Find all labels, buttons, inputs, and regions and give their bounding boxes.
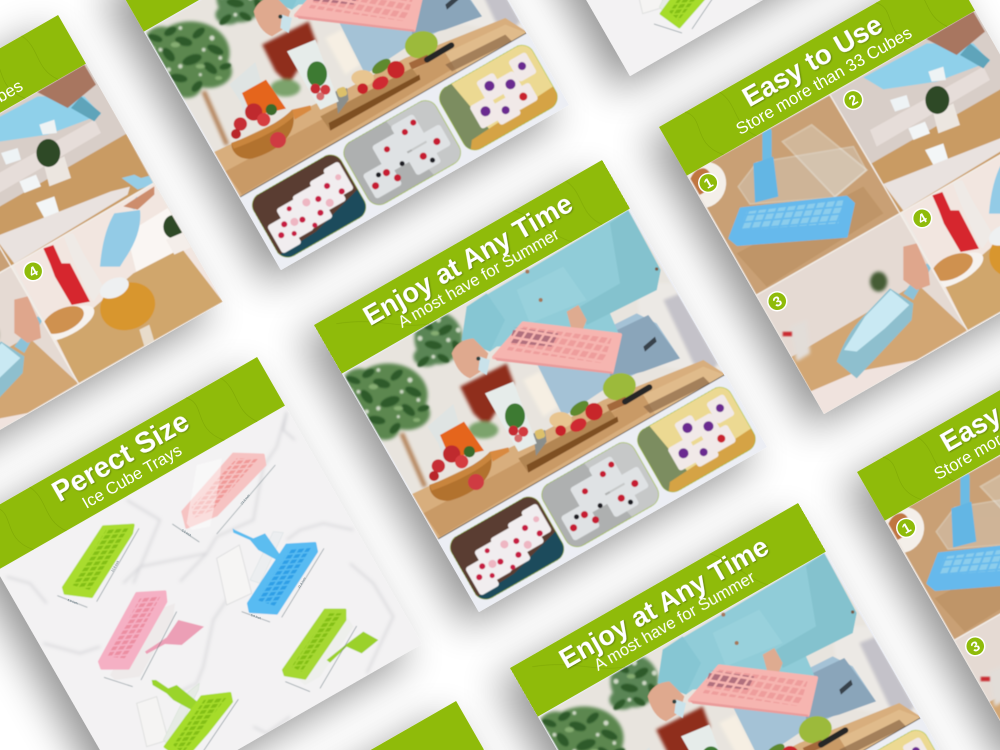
card: bottom banner corner	[168, 701, 621, 750]
card: Perfect Size, top copy	[465, 0, 918, 76]
card: Easy to Use, bottom right copy	[857, 307, 1000, 750]
title: Enjoy at Any Time	[554, 530, 774, 675]
card: Enjoy at Any Time, centre	[314, 160, 767, 612]
card base	[510, 503, 963, 750]
card base	[314, 160, 767, 612]
size labels: 22.8 Inch	[110, 560, 120, 572]
banner	[314, 160, 630, 374]
size labels: 5.5 Inch	[250, 613, 262, 621]
marble and trays	[465, 0, 918, 76]
photo	[510, 503, 961, 750]
banner and step badges	[0, 15, 167, 370]
card: Easy to Use, left copy	[0, 15, 223, 468]
banner	[0, 357, 285, 571]
card base	[659, 0, 1000, 414]
card base	[465, 0, 918, 76]
title: Perect Size	[47, 405, 195, 509]
step 1 badge	[695, 170, 721, 196]
step photos	[659, 0, 1000, 415]
subtitle: A most have for Summer	[394, 224, 563, 332]
photo and thumbnails	[314, 160, 765, 612]
size labels: 22.8 Inch	[297, 576, 307, 589]
banner and badges: 1	[899, 519, 914, 537]
title: Enjoy at Any Time	[358, 187, 578, 332]
step photos	[0, 15, 223, 468]
banner and badges	[857, 307, 1000, 662]
marble and trays	[0, 357, 422, 750]
card: Enjoy at Any Time, bottom copy	[510, 503, 963, 750]
photo and thumbnails	[116, 0, 567, 270]
subtitle: A most have for Summer	[590, 567, 759, 675]
size labels	[67, 493, 307, 621]
card base	[0, 15, 223, 467]
step photos	[857, 307, 1000, 750]
step 4 badge: 4	[915, 209, 930, 227]
green banner	[116, 0, 432, 32]
step 4 badge	[909, 205, 935, 231]
card base	[116, 0, 569, 270]
banner	[510, 503, 826, 717]
subtitle: Ice Cube Trays	[79, 441, 185, 512]
card: Perfect Size, left	[0, 357, 422, 750]
step 2 badge	[840, 87, 866, 113]
card: Enjoy at Any Time, top copy	[116, 0, 569, 270]
banner and step badges	[659, 0, 1000, 317]
banner and badges: 3	[968, 637, 983, 655]
card base	[857, 307, 1000, 750]
banner corner	[168, 701, 621, 750]
card: Easy to Use, right copy	[659, 0, 1000, 415]
banner and step badges: 4	[26, 262, 41, 280]
size labels: 22.8 Inch	[240, 493, 251, 505]
size labels: 5.5 Inch	[181, 528, 192, 538]
step 3 badge: 3	[770, 292, 785, 310]
subtitle: Store more than 33 Cubes	[733, 23, 915, 139]
step 3 badge	[764, 288, 790, 314]
title: Easy to Use	[737, 8, 888, 113]
step 1 badge: 1	[701, 174, 716, 192]
card base	[0, 357, 422, 750]
green banner	[168, 701, 484, 750]
size labels: 5.5 Inch	[67, 598, 79, 606]
step 2 badge: 2	[846, 91, 861, 109]
